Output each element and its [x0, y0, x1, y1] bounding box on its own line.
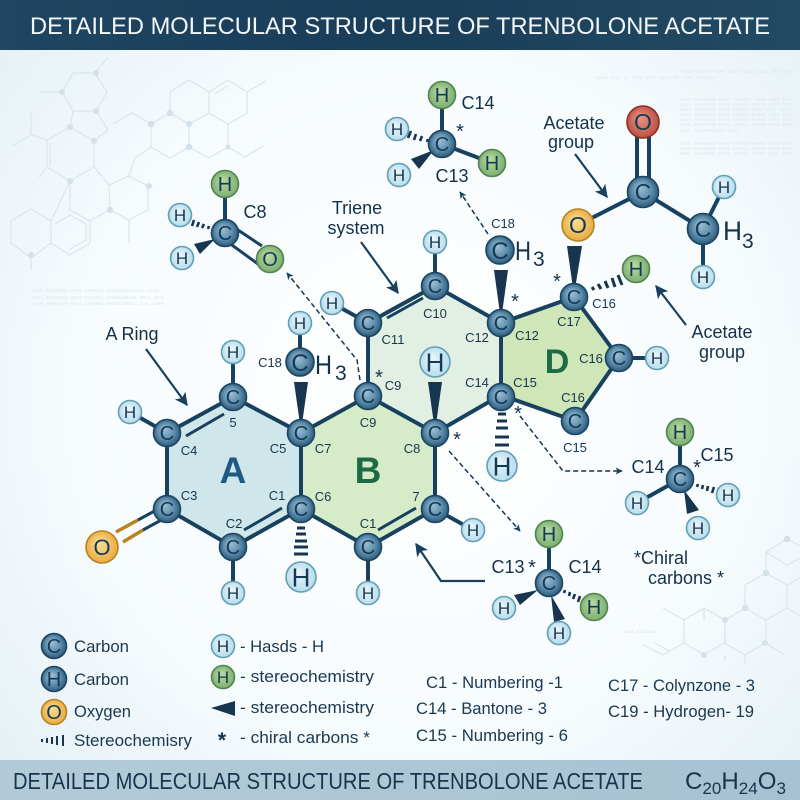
legend item: carbon H: H: [47, 669, 61, 691]
atom: carbon C17: [560, 284, 588, 310]
atom: carbon top of ring A: [220, 384, 246, 410]
decorative background data text: top right: [596, 69, 796, 157]
decorative background molecule: top left: 0011 07000010 0001 1002101 00000000101 0011 1010: [32, 295, 165, 301]
carbon numbering labels: C14: [465, 375, 489, 390]
atom: hydrogen on C4: [118, 400, 142, 424]
atom: hydrogen below C2: [222, 582, 244, 604]
ring letter B: B: [355, 450, 381, 491]
methyl group C18 right: C: [491, 238, 509, 265]
atom: large hydrogen on C8: H: [426, 348, 444, 378]
legend: symbol key column 2: [211, 634, 375, 752]
atom: carbon C5/C7: [288, 420, 314, 446]
fragment: C14/C15 chiral carbon right: H: [722, 486, 734, 505]
decorative background molecule: top left: 0010 10000200 0001 1309001 00000100016 110 11000: [32, 301, 165, 307]
panel: ring B fill: [301, 396, 435, 547]
acetate group molecule: C: [695, 216, 711, 242]
decorative background data text: top right: 0101 00000098 0000 190010 00000 1000 1001: [680, 141, 793, 147]
atom: hydrogen below ring B: H: [362, 584, 374, 603]
fragment: C13/C14 chiral carbon top: H: [435, 85, 449, 107]
atom: hydrogen on C10: [424, 230, 446, 254]
methyl group C18 left: H: [294, 314, 306, 333]
atom: carbon ring B right lower: C: [428, 499, 442, 521]
acetate group molecule: H: [718, 178, 730, 197]
fragment: C8 aldehyde: C: [218, 223, 232, 245]
carbon numbering labels: C18: [491, 216, 515, 231]
atom: carbon ring B bottom: [354, 534, 382, 560]
decorative background data text: top right: 0100 1011 11 0010 1011 0012 001 001 1000101: [596, 75, 715, 81]
atom: hydrogen on C11: [320, 292, 344, 314]
fragment: C14/C15 chiral carbon right: C14: [631, 457, 665, 477]
atom: hydrogen on C11: H: [326, 294, 338, 313]
carbon numbering labels: 7: [412, 489, 420, 504]
carbon numbering labels: C6: [315, 489, 331, 504]
label: Chiral carbons note: carbons *: [648, 568, 724, 588]
arrow: C15 to right fragment (dashed): [520, 416, 622, 471]
label: Triene system with arrow: [327, 198, 398, 293]
atom: carbon C3: C: [160, 499, 174, 521]
legend item: chiral star: - chiral carbons *: [240, 728, 370, 747]
fragment: C13/C14 chiral carbon top: C14: [461, 93, 495, 113]
fragment: C13/C14 chiral carbon bottom: H: [542, 524, 556, 546]
decorative background molecule: top left: [11, 57, 266, 307]
panel: ring D fill: [501, 297, 619, 421]
atom: hydrogen on ring A top: [222, 340, 244, 364]
atom: hydrogen right of ring B: [462, 518, 484, 542]
fragment: C13/C14 chiral carbon bottom: *: [528, 557, 536, 579]
carbon numbering labels: C17: [557, 314, 581, 329]
atom: carbon C12: [488, 310, 514, 336]
atom: carbon C16 right: C: [612, 348, 626, 370]
atom: carbon C8: C: [428, 423, 442, 445]
atom: large hydrogen below C6: H: [292, 562, 310, 592]
carbon numbering labels: [181, 216, 616, 531]
label: Chiral carbons note: *Chiral: [634, 548, 688, 568]
ring letter D: D: [545, 343, 569, 381]
legend: numbering column 4: [608, 676, 755, 721]
legend item: carbon H: Carbon: [74, 670, 129, 689]
atom: carbon C4: C: [160, 423, 174, 445]
atom: hydrogen on ring A top: H: [227, 343, 239, 362]
atom: large hydrogen on C8: [420, 347, 450, 378]
legend: atom key column 1: [42, 634, 192, 750]
arrow: C18 to C13 fragment (dashed): [460, 192, 488, 234]
carbon numbering labels: C16: [561, 390, 585, 405]
steroid skeleton bonds: [116, 242, 657, 593]
atom: large hydrogen below C14: [487, 451, 517, 482]
atom: carbon C10: C: [428, 276, 442, 298]
atom: carbon C10: [422, 272, 448, 300]
chiral star markers: *: [453, 429, 461, 451]
fragment: C13/C14 chiral carbon top: *: [456, 121, 464, 143]
panel: ring C fill: [368, 286, 501, 433]
methyl group C18 right: 3: [533, 248, 545, 271]
atom: carbon top of ring A: C: [226, 387, 240, 409]
label: Acetate group right with arrow: group: [699, 342, 745, 362]
fragment: C14/C15 chiral carbon right: H: [673, 422, 687, 444]
fragment: C13/C14 chiral carbon top: H: [391, 120, 403, 139]
arrow: C9 to C8 aldehyde (dashed): [287, 273, 360, 380]
fragment: C13/C14 chiral carbon top: [386, 82, 506, 186]
fragment: C14/C15 chiral carbon right: C15: [700, 445, 734, 465]
legend item: stereochemistry hash: Stereochemisry: [74, 731, 192, 750]
chiral star markers: *: [514, 403, 522, 425]
atom: carbon C4: [154, 420, 180, 446]
legend item: chiral star: [218, 728, 370, 752]
label: Acetate group right with arrow: [656, 286, 753, 362]
atom: carbon C12: C: [494, 313, 508, 335]
legend item: hydrogen: - Hasds - H: [240, 637, 324, 656]
carbon numbering labels: C9: [385, 378, 401, 393]
atom: carbon ring B right lower: [422, 496, 448, 522]
atom: green hydrogen on C17: [622, 256, 650, 282]
carbon numbering labels: C1: [269, 488, 285, 503]
label: A Ring with arrow: [105, 324, 187, 405]
carbon numbering labels: C18: [258, 355, 282, 370]
chemical formula: O: [758, 768, 777, 795]
label: A Ring with arrow: A Ring: [105, 324, 159, 344]
carbon numbering labels: C12: [515, 328, 539, 343]
fragment: C13/C14 chiral carbon bottom: H: [553, 624, 565, 643]
ring letter A: A: [220, 450, 246, 491]
footer bar: [0, 760, 800, 800]
decorative background data text: top right: 00200 01010 0000 10011 011 10101 1010 0001: [680, 69, 796, 75]
legend item: carbon: C: [47, 636, 61, 658]
label: Acetate group right with arrow: Acetate: [691, 322, 753, 342]
chemical formula: 20: [702, 779, 721, 798]
arrow: solid elbow to ring B: [416, 544, 485, 581]
carbon numbering labels: C9: [360, 415, 376, 430]
fragment: C13/C14 chiral carbon bottom: C13: [491, 557, 525, 577]
methyl group C18 left: 3: [335, 362, 347, 385]
atom: hydrogen right of ring B: H: [467, 521, 479, 540]
atoms: ring B: [0, 0, 484, 604]
fragment: C13/C14 chiral carbon bottom: [491, 520, 608, 644]
atom: hydrogen on C4: H: [124, 403, 136, 422]
acetate group molecule: O: [569, 212, 587, 238]
fragment: C13/C14 chiral carbon bottom: C: [542, 573, 556, 595]
fragment: C14/C15 chiral carbon right: H: [692, 519, 704, 538]
header bar: [0, 0, 800, 50]
decorative background data text: top right: 1101 01000000011 1003: [680, 128, 738, 134]
chemical formula: H: [721, 768, 739, 795]
legend: numbering column 4: C17 - Colynzone - 3: [608, 676, 755, 695]
atom: hydrogen below C2: H: [227, 584, 239, 603]
label: Triene system with arrow: Triene: [332, 198, 382, 218]
atom: carbon C16 right: [606, 344, 632, 372]
carbon numbering labels: C16: [579, 351, 603, 366]
fragment: C8 aldehyde: H: [174, 206, 186, 225]
label: Acetate group top with arrow: Acetate: [543, 113, 605, 133]
chiral star markers: *: [553, 271, 561, 293]
atom: carbon C5/C7: C: [294, 423, 308, 445]
atom: carbon C14/C15: C: [494, 387, 508, 409]
decorative background data text: top right: 0011 00000210 0070 100061 03000 1000 0011: [680, 112, 793, 118]
fragment: C8 aldehyde: O: [262, 249, 278, 271]
footer title: DETAILED MOLECULAR STRUCTURE OF TRENBOLONE ACETATE: [13, 768, 643, 794]
fragment: C8 aldehyde: H: [218, 174, 232, 196]
fragment: C8 aldehyde: [168, 170, 284, 272]
atom: hydrogen on C16: [646, 346, 668, 370]
atom: hydrogen on C10: H: [429, 233, 441, 252]
atom: carbon C1/C6: [288, 496, 314, 522]
decorative background data text: top right: 0081 03000340 0090 190061 0000 1000 1101: [680, 107, 791, 113]
carbon numbering labels: C1: [360, 516, 376, 531]
atom: hydrogen on C16: H: [651, 349, 663, 368]
decorative background data text: top right: 0021 00000080 0030 100021 03000 1000 0011: [680, 146, 793, 152]
carbon numbering labels: C11: [382, 332, 404, 347]
atom: carbon C1/C6: C: [294, 499, 308, 521]
carbon numbering labels: C8: [404, 441, 420, 456]
acetate group molecule: H: [697, 268, 709, 287]
decorative background data text: top right: 0000 10000005 0030 100011 01000 1000 0000: [680, 151, 793, 157]
methyl group C18 left: C: [291, 350, 309, 377]
atom: carbon C11: C: [361, 313, 375, 335]
legend item: carbon H: [42, 666, 129, 692]
fragment: C13/C14 chiral carbon bottom: H: [587, 597, 601, 619]
atom: carbon C9: [354, 382, 382, 410]
chemical formula: 24: [739, 779, 758, 798]
fragment: C13/C14 chiral carbon top: H: [485, 153, 499, 175]
title: DETAILED MOLECULAR STRUCTURE OF TRENBOLONE ACETATE: [30, 13, 770, 40]
atom: hydrogen below ring B: [356, 582, 380, 604]
atom: carbon C8: [422, 420, 448, 446]
carbon numbering labels: C5: [270, 441, 286, 456]
methyl group C18 left: [286, 312, 347, 385]
atom: carbon C14/C15: [488, 384, 514, 410]
chiral star markers: *: [511, 291, 519, 313]
chiral star markers: [375, 271, 561, 451]
fragment: C13/C14 chiral carbon top: C: [435, 134, 449, 156]
decorative background data text: top right: 0111 00000030 0070 1000012 0000 1000 1111: [680, 97, 793, 103]
carbon numbering labels: C15: [513, 375, 537, 390]
fragment: C13/C14 chiral carbon bottom: C14: [568, 557, 602, 577]
legend item: chiral star: *: [218, 729, 227, 752]
legend: numbering column 3: C1 - Numbering -1: [426, 673, 563, 692]
chemical formula: 3: [777, 779, 786, 798]
carbon numbering labels: C4: [181, 443, 197, 458]
legend item: carbon: Carbon: [74, 637, 129, 656]
legend item: oxygen: O: [46, 702, 62, 724]
decorative background molecule: top left: 0011 03000030 0001 0300101 00001020010011 1100: [32, 288, 159, 294]
legend item: hydrogen: [212, 634, 324, 658]
legend item: oxygen: Oxygen: [74, 702, 131, 721]
legend item: green hydrogen: H: [217, 668, 229, 687]
acetate group molecule: [562, 106, 754, 288]
legend item: green hydrogen: [212, 666, 375, 688]
decorative background data text: top right: 0011 09000190 0030 100001 01000 1000 0011: [680, 122, 793, 128]
legend item: green hydrogen: - stereochemistry: [240, 667, 375, 686]
fragment: C13/C14 chiral carbon top: H: [393, 166, 405, 185]
fragment: C14/C15 chiral carbon right: [626, 418, 740, 540]
acetate group molecule: H: [723, 216, 742, 246]
fragment: C14/C15 chiral carbon right: *: [693, 457, 701, 479]
decorative background data text: top right: 0081 78000010 0030 100001 01000 1000 1111: [680, 117, 793, 123]
legend item: wedge: - stereochemistry: [240, 698, 375, 717]
atom: carbon C15 lower: [562, 408, 588, 434]
decorative background molecule: bottom right: 0031 0101000: [623, 629, 656, 635]
label: Triene system with arrow: system: [327, 218, 385, 238]
atom: carbon C2: C: [226, 537, 240, 559]
arrow: C8 to bottom fragment (dashed): [449, 451, 520, 531]
atom: carbon ring B bottom: C: [361, 537, 375, 559]
methyl group C18 right: [486, 236, 545, 271]
label: Acetate group top with arrow: [543, 113, 607, 197]
atom: carbon C17: C: [567, 287, 581, 309]
fragment: C14/C15 chiral carbon right: C: [673, 469, 687, 491]
atom: carbon C2: [220, 534, 246, 560]
atom: oxygen ketone: [86, 531, 118, 563]
fragment: C13/C14 chiral carbon top: C13: [435, 166, 469, 186]
carbon numbering labels: C10: [423, 306, 447, 321]
panel: ring A fill: [167, 397, 301, 547]
carbon numbering labels: C12: [465, 330, 489, 345]
atom: oxygen ketone: O: [93, 535, 111, 560]
legend: numbering column 3: [416, 673, 568, 745]
atom: green hydrogen on C17: H: [629, 259, 643, 281]
fragment: C8 aldehyde: C8: [243, 202, 267, 222]
atom: carbon C9: C: [361, 386, 375, 408]
atoms: ring C and D: [0, 0, 668, 482]
atom: carbon C3: [154, 496, 180, 522]
fragment: C14/C15 chiral carbon right: H: [631, 494, 643, 513]
acetate group molecule: O: [634, 109, 652, 135]
acetate group molecule: C: [635, 179, 651, 205]
legend item: carbon: [42, 634, 129, 658]
fragment: C13/C14 chiral carbon bottom: H: [498, 599, 510, 618]
atom: large hydrogen below C14: H: [493, 452, 511, 482]
chemical formula: C: [685, 768, 702, 795]
atom: carbon C15 lower: C: [568, 411, 582, 433]
atoms: ring A: [0, 0, 316, 604]
label: Acetate group top with arrow: group: [548, 132, 594, 152]
carbon numbering labels: C7: [315, 441, 331, 456]
wedge and hash stereo bonds on skeleton: [294, 246, 622, 554]
legend item: hydrogen: H: [217, 637, 229, 656]
decorative background molecule: bottom right: [623, 536, 800, 664]
carbon numbering labels: C16: [592, 296, 616, 311]
fragment: C8 aldehyde: H: [176, 249, 188, 268]
carbon numbering labels: C2: [226, 516, 242, 531]
carbon numbering labels: C3: [181, 488, 197, 503]
acetate group molecule: 3: [742, 230, 754, 253]
decorative background data text: top right: 0011 10000040 0000 100001 01000 1000 0011: [680, 102, 793, 108]
carbon numbering labels: C15: [563, 440, 587, 455]
legend: numbering column 3: C14 - Bantone - 3: [416, 699, 547, 718]
atom: carbon C11: [354, 310, 382, 336]
atom: large hydrogen below C6: [286, 562, 316, 592]
carbon numbering labels: 5: [229, 415, 237, 430]
methyl group C18 left: H: [315, 350, 332, 380]
legend: numbering column 4: C19 - Hydrogen- 19: [608, 702, 754, 721]
legend item: oxygen: [42, 700, 131, 724]
chiral star markers: *: [375, 367, 383, 389]
label: Chiral carbons note: [634, 548, 724, 588]
methyl group C18 right: H: [515, 236, 531, 266]
legend: numbering column 3: C15 - Numbering - 6: [416, 726, 568, 745]
